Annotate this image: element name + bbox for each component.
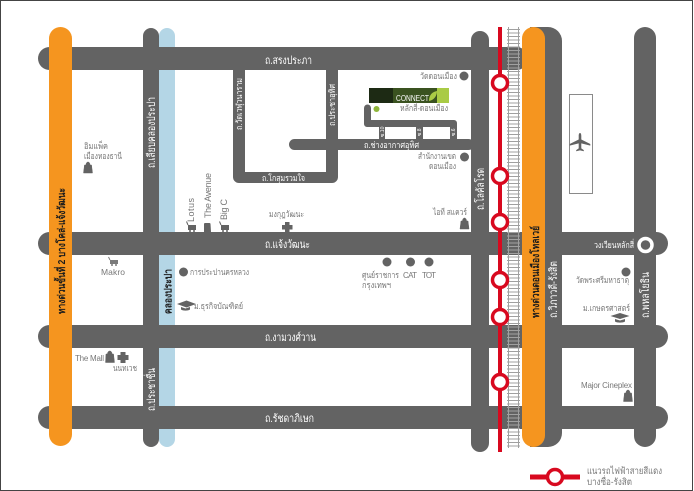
road labels: ถ.งามวงศ์วาน (265, 331, 316, 344)
landmark: ไอที สแควร์ (432, 207, 469, 229)
legend: red line: แนวรถไฟฟ้าสายสีแดง (587, 465, 662, 477)
landmark: ศูนย์ราชการ กรุงเทพฯ: ศูนย์ราชการ (362, 270, 399, 281)
landmark: ม.เกษตรศาสตร์ (583, 303, 630, 323)
road labels: ถ.รัชดาภิเษก (265, 413, 314, 425)
expressway: left orange (49, 27, 72, 446)
landmark: Big C: Big C (219, 198, 229, 220)
expressway: right orange: ทางด่วนดอนเมืองโทลเวย์ (529, 226, 542, 318)
canal: คลองประปา (159, 28, 175, 447)
landmark: การประปานครหลวง: การประปานครหลวง (190, 267, 249, 277)
landmark: ม.ธุรกิจบัณฑิตย์ (177, 300, 243, 312)
landmark: TOT: TOT (422, 271, 436, 280)
road labels: ถ.ประชาชื่น (143, 368, 158, 411)
landmark: Lotus: Lotus (186, 198, 196, 222)
landmark: มงกุฎวัฒนะ: มงกุฎวัฒนะ (269, 209, 304, 220)
landmark: Major Cineplex: Major Cineplex (581, 381, 632, 390)
landmark: Makro (101, 257, 125, 277)
road labels: ถ.โลคัลโรด (473, 168, 487, 210)
railway tracks (507, 27, 520, 448)
legend: red line (530, 465, 662, 488)
landmark: Major Cineplex (581, 381, 632, 402)
road labels: ถ.วัดเวฬุวนาราม (234, 78, 245, 130)
road labels: ถ.ประชาอุทิศ (327, 83, 338, 126)
landmark: The Avenue: The Avenue (203, 173, 213, 218)
project logo: The Connect: CONNECT (396, 93, 429, 103)
landmark: อิมแพ็ค เมืองทองธานี (84, 140, 122, 173)
landmark: ม.เกษตรศาสตร์: ม.เกษตรศาสตร์ (583, 303, 630, 313)
road labels: วงเวียนหลักสี่ (594, 238, 634, 250)
landmark: อิมแพ็ค เมืองทองธานี: อิมแพ็ค (84, 140, 108, 151)
road labels: ถ.พหลโยธิน (638, 272, 652, 318)
landmark: วัดพระศรีมหาธาตุ (576, 268, 630, 286)
road labels: ถ.สรงประภา (265, 55, 312, 67)
road labels: ถ.วิภาวดี-รังสิต (547, 261, 560, 318)
road labels: ซ.10 (380, 126, 386, 137)
project logo: The Connect (369, 88, 449, 113)
landmark: TOT (422, 258, 436, 280)
landmark: มงกุฎวัฒนะ (269, 209, 304, 232)
landmark: สำนักงานเขตดอนเมือง: ดอนเมือง (429, 161, 456, 171)
red line with stations (492, 27, 508, 452)
landmark: สำนักงานเขตดอนเมือง: สำนักงานเขต (418, 151, 456, 161)
landmark: สำนักงานเขตดอนเมือง (418, 151, 469, 171)
landmark: The Mall (75, 351, 114, 363)
road network (38, 27, 668, 452)
landmark: การประปานครหลวง (179, 267, 249, 277)
project logo: The Connect: หลักสี่-ดอนเมือง (400, 102, 448, 113)
landmark: วัดพระศรีมหาธาตุ: วัดพระศรีมหาธาตุ (576, 275, 629, 286)
airport (570, 94, 592, 194)
landmark: วัดดอนเมือง: วัดดอนเมือง (420, 71, 457, 81)
legend: red line: บางซื่อ-รังสิต (587, 475, 632, 488)
road labels: ถ.โกสุมรวมใจ (262, 173, 305, 184)
expressway: left orange: ทางด่วนขั้นที่ 2 บางโคล่-แจ้งวัฒนะ (53, 188, 68, 314)
landmark: CAT: CAT (403, 271, 417, 280)
landmark: Big C (219, 198, 229, 232)
landmark: The Mall: The Mall (75, 354, 104, 363)
road labels: ซ.6 (451, 128, 457, 136)
landmark: นนทเวช: นนทเวช (113, 363, 137, 373)
road labels: ถ.ช่างอากาศอุทิศ (364, 140, 419, 151)
landmark: ม.ธุรกิจบัณฑิตย์: ม.ธุรกิจบัณฑิตย์ (194, 301, 243, 312)
landmark: ไอที สแควร์: ไอที สแควร์ (432, 207, 467, 217)
road labels: ซ.8 (417, 128, 423, 136)
landmark: ศูนย์ราชการ กรุงเทพฯ: กรุงเทพฯ (362, 280, 391, 291)
landmark: อิมแพ็ค เมืองทองธานี: เมืองทองธานี (84, 151, 122, 161)
road labels: ถ.เลียบคลองประปา (145, 97, 158, 168)
landmark: Makro: Makro (101, 267, 125, 277)
landmark: ศูนย์ราชการ กรุงเทพฯ (362, 258, 399, 291)
road labels (143, 55, 652, 425)
canal: คลองประปา: คลองประปา (162, 269, 174, 314)
landmark: นนทเวช (113, 352, 137, 373)
landmark: CAT (403, 258, 417, 280)
landmark: วงเวียนหลักสี่ (639, 238, 652, 252)
expressway: right orange (522, 27, 545, 447)
landmark: Lotus (186, 198, 196, 232)
road labels: ถ.แจ้งวัฒนะ (265, 239, 310, 251)
